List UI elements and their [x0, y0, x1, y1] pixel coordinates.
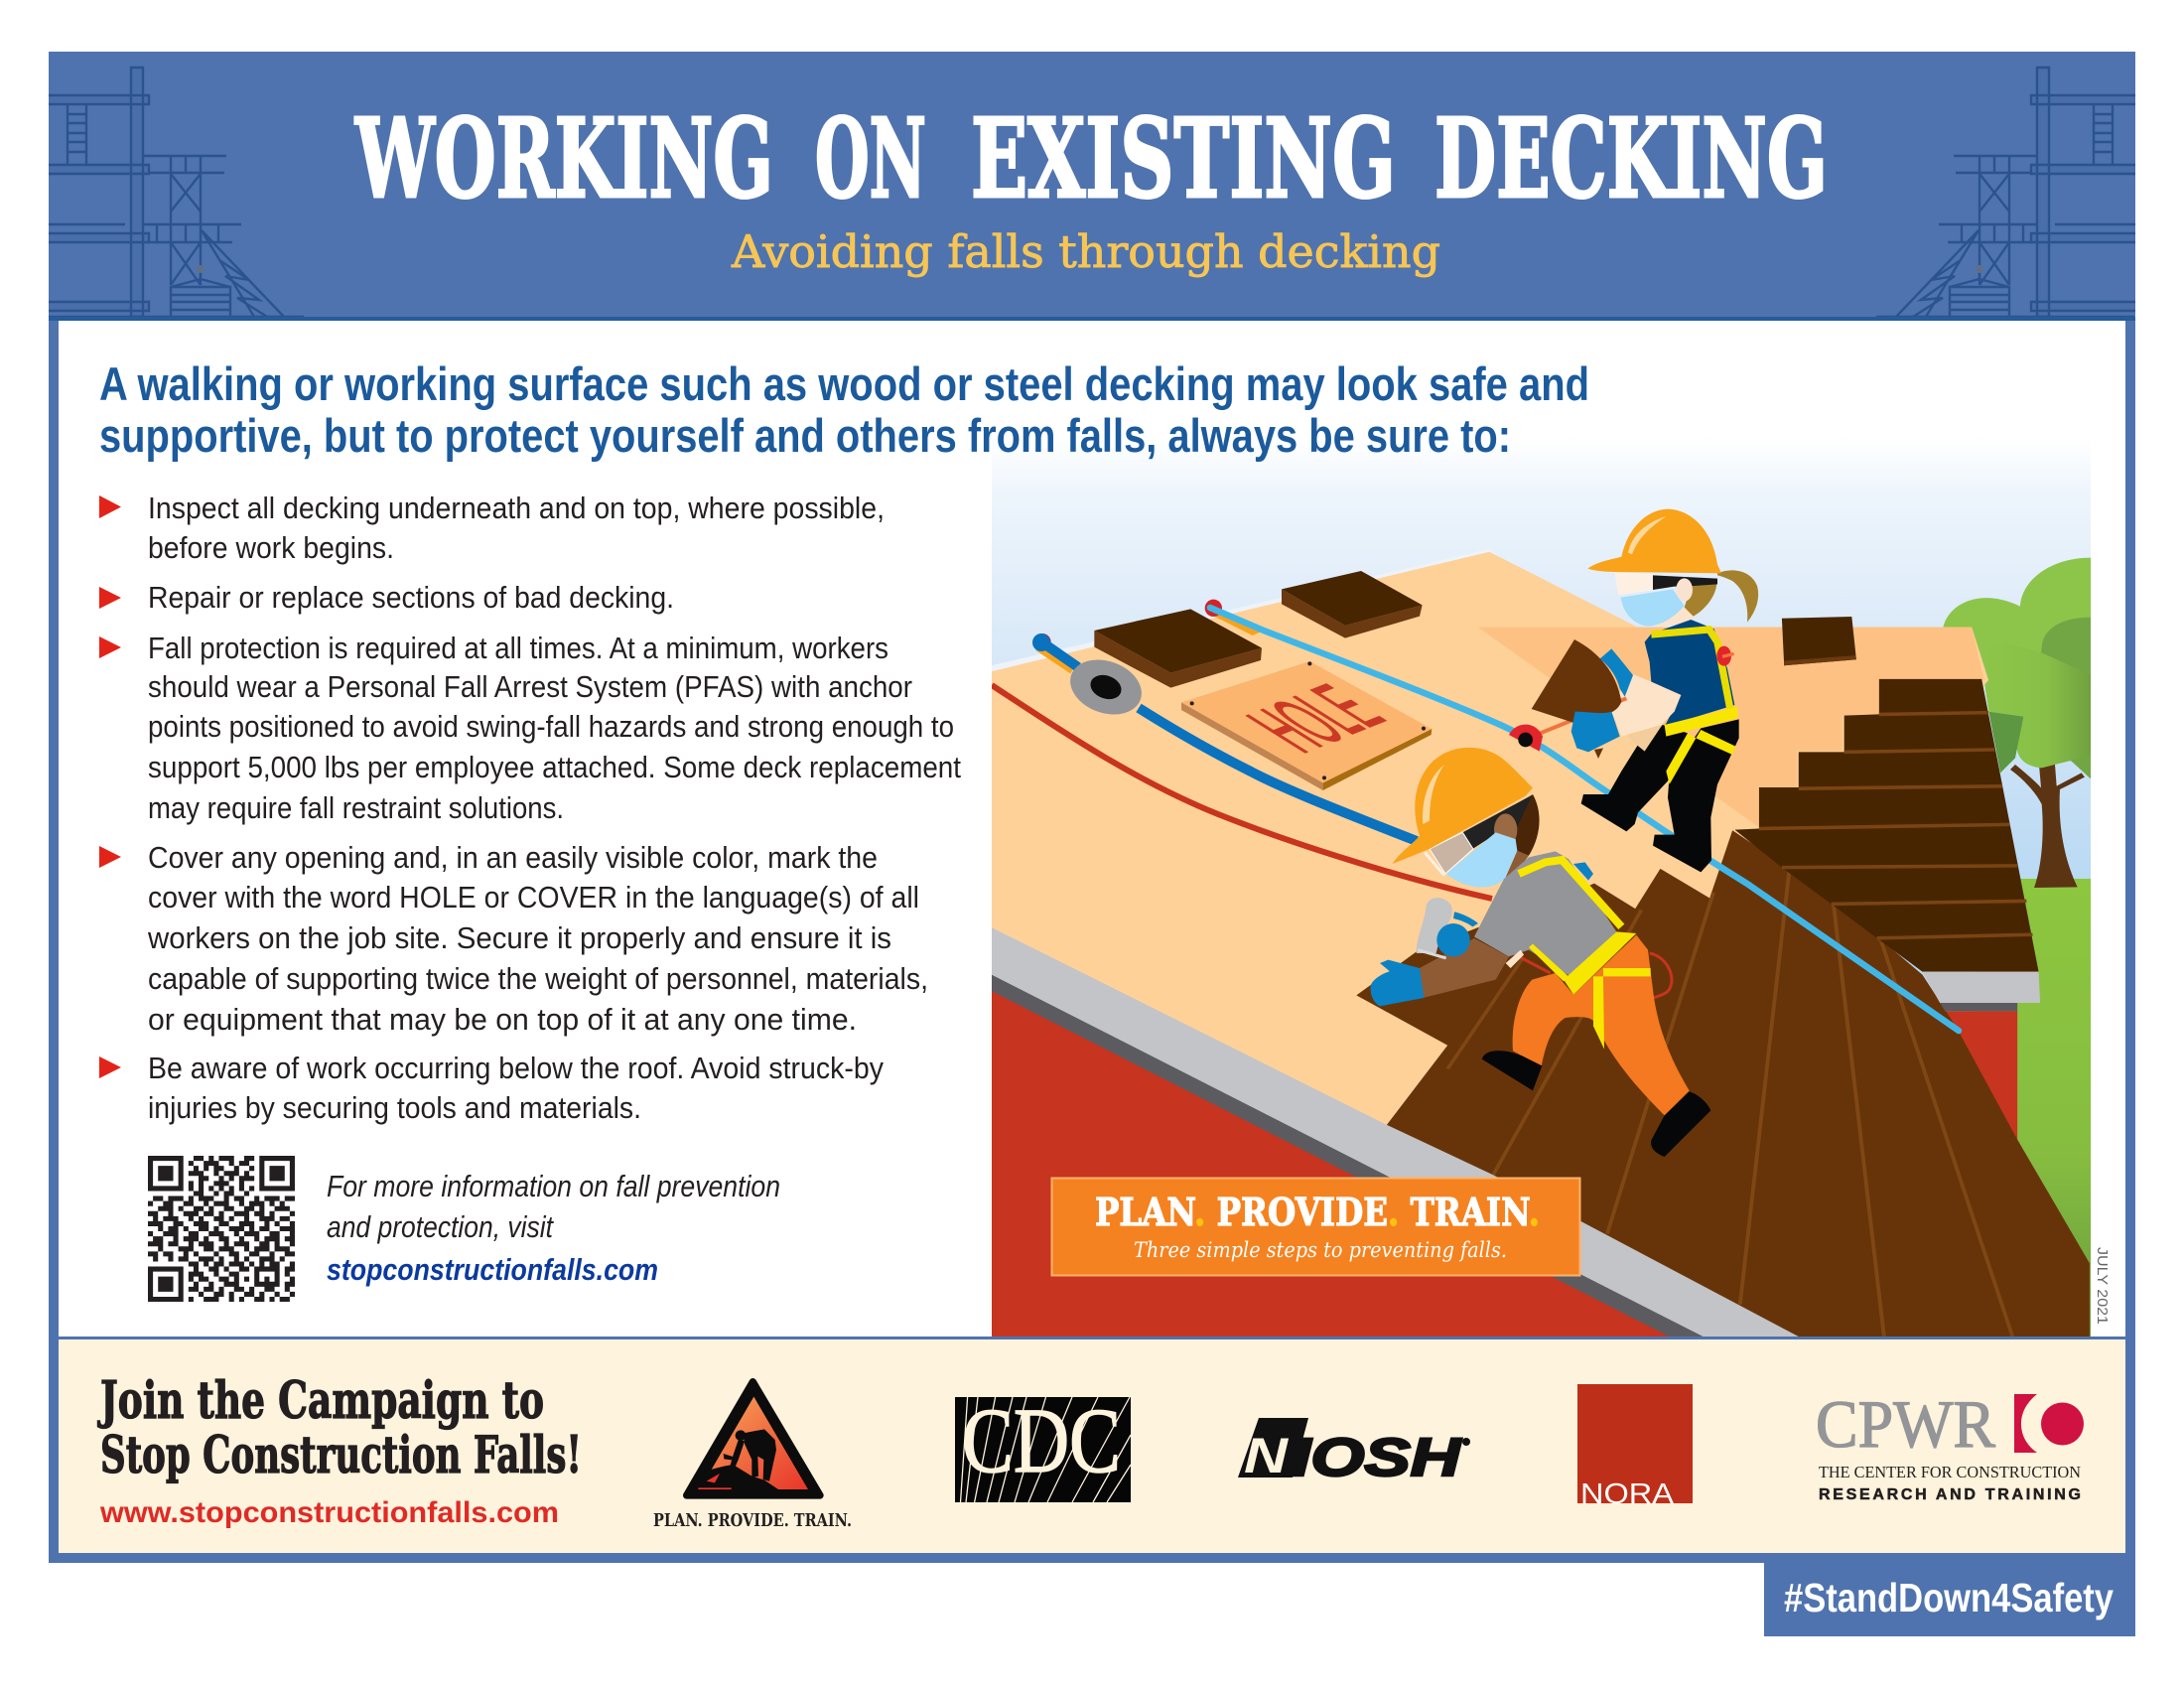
- callout: Plan Provide Train: PLAN. PROVIDE. TRAIN.: [1095, 1190, 1540, 1234]
- shirt: [1474, 851, 1616, 976]
- boots: [1482, 1051, 1710, 1157]
- anchor ring: [1070, 659, 1142, 715]
- item: fall protection: support 5,000 lbs per employee attached. Some deck replacement: [148, 750, 961, 784]
- lifeline: blue: [1037, 638, 1417, 841]
- panel: illustration of workers on roof decking: [992, 437, 2092, 1339]
- logo: NORA: [1577, 1384, 1693, 1510]
- item: inspect: Inspect all decking underneath and on top, where possible,: [148, 491, 885, 525]
- anchor ring: [1509, 725, 1543, 752]
- glasses: [1425, 852, 1444, 876]
- lanyard: [1512, 953, 1672, 998]
- date stamp: JULY 2021: [2094, 1247, 2111, 1325]
- scaffold drawing: left: [40, 68, 304, 317]
- campaign heading: Stop Construction Falls!: [100, 1426, 582, 1485]
- gloves: [1453, 912, 1478, 926]
- torso: [1645, 620, 1734, 727]
- glasses strap: [1653, 575, 1717, 590]
- worker: upper, blue shirt: [1509, 509, 1758, 872]
- intro heading: [99, 357, 1589, 462]
- panel: main white content: [59, 321, 2125, 1337]
- item: repair: Repair or replace sections of bad decking.: [148, 580, 674, 615]
- neck: [1655, 608, 1695, 628]
- item: inspect: [99, 491, 885, 565]
- logo: CPWR: RESEARCH AND TRAINING: [1819, 1486, 2081, 1503]
- more information text: and protection, visit: [327, 1209, 554, 1244]
- grass: [1976, 879, 2091, 1337]
- logo: NIOSH: IOSH: [1292, 1428, 1461, 1487]
- item: cover openings: or equipment that may be on top of it at any one time.: [148, 1002, 857, 1037]
- red building wall: [992, 989, 2017, 1339]
- fascia: [1922, 972, 2040, 1011]
- legs: [1581, 719, 1739, 872]
- logo: Plan Provide Train triangle: [653, 1382, 852, 1531]
- campaign url: www.stopconstructionfalls.com: [99, 1496, 559, 1529]
- HOLE lettering: HOLE: [1225, 672, 1407, 766]
- logo: CPWR: THE CENTER FOR CONSTRUCTION: [1819, 1463, 2081, 1481]
- logo: CPWR: [1816, 1386, 2084, 1503]
- item: fall protection: Fall protection is required at all times. At a minimum, workers: [148, 631, 888, 665]
- scaffold drawing: right: [1876, 68, 2140, 317]
- item: below the roof: Be aware of work occurring below the roof. Avoid struck-by: [148, 1051, 884, 1085]
- campaign heading: Join the Campaign to: [97, 1371, 544, 1431]
- trousers: [1513, 935, 1690, 1115]
- logo: NIOSH: [1238, 1418, 1470, 1487]
- title: EXISTING: [971, 94, 1396, 222]
- held plank: [1532, 639, 1621, 759]
- arm: [1611, 673, 1681, 737]
- logo: NORA: NORA: [1580, 1478, 1675, 1510]
- eave trim: [992, 927, 1805, 1339]
- item: below the roof: injuries by securing tools and materials.: [148, 1090, 641, 1125]
- subtitle: Avoiding falls through decking: [731, 225, 1440, 278]
- logo: NIOSH: N: [1244, 1428, 1289, 1483]
- more information text: [327, 1169, 780, 1287]
- title: ON: [815, 94, 926, 222]
- checklist: [99, 491, 961, 1125]
- helmet: [1587, 509, 1721, 573]
- item: cover openings: [99, 840, 928, 1037]
- rear glove: [1573, 862, 1593, 881]
- harness: [1519, 860, 1621, 926]
- helmet: [1393, 748, 1533, 864]
- ponytail and hair: [1685, 570, 1758, 623]
- mask: [1621, 589, 1685, 627]
- callout: Plan Provide Train: [1052, 1178, 1580, 1275]
- panel: header banner: [40, 52, 2140, 321]
- campaign heading: [97, 1371, 582, 1485]
- QR code: [148, 1156, 295, 1302]
- rope anchors: [1033, 600, 1264, 673]
- roof steps: [1734, 679, 2039, 972]
- item: fall protection: [99, 631, 961, 825]
- callout: Plan Provide Train: Three simple steps to preventing falls.: [1134, 1238, 1507, 1262]
- glasses lens: [1615, 572, 1655, 595]
- shadow under arm: [1626, 722, 1665, 752]
- hip ring: [1716, 646, 1731, 666]
- item: cover openings: Cover any opening and, in an easily visible color, mark the: [148, 840, 878, 875]
- stacked materials: [1094, 571, 1423, 688]
- logo: Plan Provide Train triangle: PLAN. PROVIDE. TRAIN.: [653, 1510, 852, 1531]
- hashtag tab: [1764, 1553, 2135, 1636]
- mask: [1446, 832, 1517, 888]
- lifeline: light blue: [1210, 608, 1959, 1031]
- title: WORKING: [354, 94, 773, 222]
- item: fall protection: points positioned to avoid swing-fall hazards and strong enough to: [148, 709, 954, 744]
- nail gun: [1417, 898, 1452, 953]
- panel: campaign footer: [49, 1336, 2135, 1563]
- third stacked board: [1782, 617, 1856, 665]
- item: fall protection: should wear a Personal Fall Arrest System (PFAS) with anchor: [148, 669, 912, 704]
- hair: [1509, 794, 1540, 856]
- more information text: For more information on fall prevention: [327, 1169, 780, 1203]
- intro heading: A walking or working surface such as wood or steel decking may look safe and: [99, 357, 1589, 410]
- more information text: stopconstructionfalls.com: [327, 1252, 658, 1287]
- item: inspect: before work begins.: [148, 530, 394, 565]
- lifeline: red: [992, 685, 1492, 899]
- intro heading: supportive, but to protect yourself and others from falls, always be sure to:: [99, 409, 1511, 462]
- item: cover openings: cover with the word HOLE or COVER in the language(s) of all: [148, 880, 919, 914]
- logo: CDC: CDC: [962, 1390, 1121, 1492]
- title: [354, 94, 1828, 222]
- item: cover openings: workers on the job site. Secure it properly and ensure it is: [147, 920, 891, 955]
- hashtag tab: #StandDown4Safety: [1784, 1575, 2114, 1620]
- arm: [1420, 938, 1509, 998]
- item: fall protection: may require fall restraint solutions.: [148, 790, 564, 825]
- worker: lower, grey shirt: [1371, 748, 1710, 1157]
- roof decking: [992, 549, 1988, 1125]
- title: DECKING: [1434, 94, 1828, 222]
- gloves: [1571, 648, 1633, 752]
- harness: [1651, 630, 1730, 712]
- connector: [1541, 698, 1626, 733]
- hole cover: [1181, 661, 1432, 790]
- tree: [1943, 558, 2092, 888]
- item: below the roof: [99, 1051, 884, 1125]
- logo: CPWR: CPWR: [1816, 1386, 1996, 1462]
- exposed brown sheathing: [1356, 830, 2090, 1339]
- item: cover openings: capable of supporting twice the weight of personnel, materials,: [148, 961, 928, 996]
- sky: [992, 437, 2091, 1337]
